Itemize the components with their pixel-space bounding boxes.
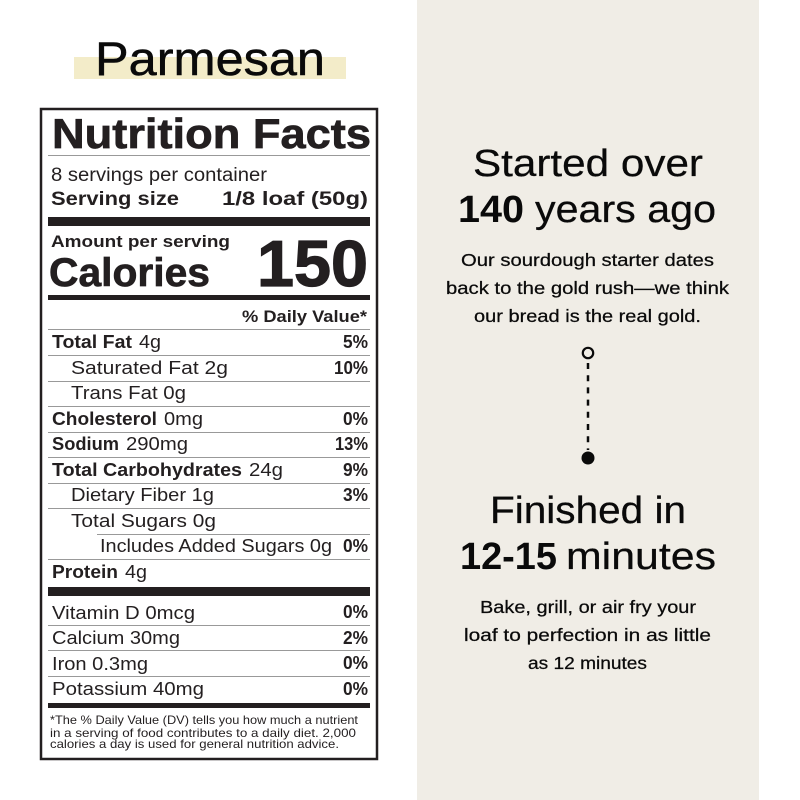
calories block: Calories xyxy=(49,251,210,295)
vitamins and minerals rows: Vitamin D 0mcg xyxy=(52,603,195,623)
vitamins and minerals rows xyxy=(52,602,368,699)
heading: Finished in 12-15 minutes: minutes xyxy=(566,536,716,578)
calories block: 150 xyxy=(257,227,368,300)
servings block: Serving size xyxy=(51,188,179,210)
heading: Started over 140 years ago: years ago xyxy=(535,189,716,231)
vitamins and minerals rows: 2% xyxy=(343,628,368,648)
nutrient rows: Total Carbohydrates xyxy=(52,460,242,480)
text block: bake, grill, or air fry: loaf to perfection in as little xyxy=(464,625,711,645)
right background panel xyxy=(417,0,759,800)
nutrient rows: 0mg xyxy=(164,409,203,429)
nutrient rows: Total Sugars 0g xyxy=(71,511,216,531)
text block: bake, grill, or air fry: Bake, grill, or air fry your xyxy=(480,597,696,617)
nutrient rows: Trans Fat 0g xyxy=(71,383,186,403)
nutrient rows: 13% xyxy=(335,434,368,454)
footnote: *The % Daily Value (DV) tells you how much a nutrient xyxy=(50,713,359,727)
vitamins and minerals rows: Potassium 40mg xyxy=(52,679,204,699)
text block: bake, grill, or air fry xyxy=(464,597,711,673)
panel: nutrition facts label xyxy=(41,109,377,759)
nutrient rows: 4g xyxy=(125,562,147,582)
nutrient rows: Dietary Fiber 1g xyxy=(71,485,214,505)
nutrient rows: 0% xyxy=(343,536,368,556)
nutrient rows: 9% xyxy=(343,460,368,480)
heading: Finished in 12-15 minutes: Finished in xyxy=(490,490,686,532)
servings block: 1/8 loaf (50g) xyxy=(222,188,368,210)
footnote: calories a day is used for general nutrition advice. xyxy=(50,737,339,751)
text block: bake, grill, or air fry: as 12 minutes xyxy=(528,653,647,673)
title: Parmesan with highlight: Parmesan xyxy=(95,32,325,85)
nutrient rows xyxy=(52,332,368,582)
nutrient rows: Sodium xyxy=(52,434,119,454)
text block: sourdough starter xyxy=(446,250,729,326)
icon: dashed timeline connector xyxy=(582,348,594,464)
nutrient rows: Protein xyxy=(52,562,118,582)
nutrient rows: 290mg xyxy=(126,434,188,454)
footnote: in a serving of food contributes to a daily diet. 2,000 xyxy=(50,726,356,740)
nutrient rows: 0% xyxy=(343,409,368,429)
nutrient rows: 4g xyxy=(139,332,161,352)
nutrient rows: Saturated Fat 2g xyxy=(71,358,228,378)
servings block: 8 servings per container xyxy=(51,165,268,186)
servings block xyxy=(51,165,368,210)
calories block: Amount per serving xyxy=(51,232,230,251)
vitamins and minerals rows: Calcium 30mg xyxy=(52,628,180,648)
vitamins and minerals rows: 0% xyxy=(343,679,368,699)
text block: sourdough starter: our bread is the real gold. xyxy=(474,306,701,326)
nutrient rows: 10% xyxy=(334,358,368,378)
daily value heading: % Daily Value* xyxy=(242,307,367,326)
heading: Nutrition Facts: Nutrition Facts xyxy=(52,110,371,157)
nutrient rows: 5% xyxy=(343,332,368,352)
nutrient rows: 3% xyxy=(343,485,368,505)
text block: sourdough starter: back to the gold rush—we think xyxy=(446,278,729,298)
nutrient rows: Includes Added Sugars 0g xyxy=(100,536,332,556)
footnote xyxy=(50,713,359,751)
nutrient rows: 24g xyxy=(249,460,283,480)
nutrient rows: Total Fat xyxy=(52,332,132,352)
text block: sourdough starter: Our sourdough starter dates xyxy=(461,250,714,270)
vitamins and minerals rows: 0% xyxy=(343,602,368,622)
heading: Finished in 12-15 minutes: 12-15 xyxy=(460,536,557,578)
heading: Finished in 12-15 minutes xyxy=(460,490,716,578)
heading: Started over 140 years ago: Started over xyxy=(473,143,703,185)
vitamins and minerals rows: 0% xyxy=(343,653,368,673)
heading: Started over 140 years ago xyxy=(458,143,716,231)
heading: Started over 140 years ago: 140 xyxy=(458,189,524,231)
nutrient rows: Cholesterol xyxy=(52,409,157,429)
vitamins and minerals rows: Iron 0.3mg xyxy=(52,654,148,674)
calories block xyxy=(49,227,368,300)
